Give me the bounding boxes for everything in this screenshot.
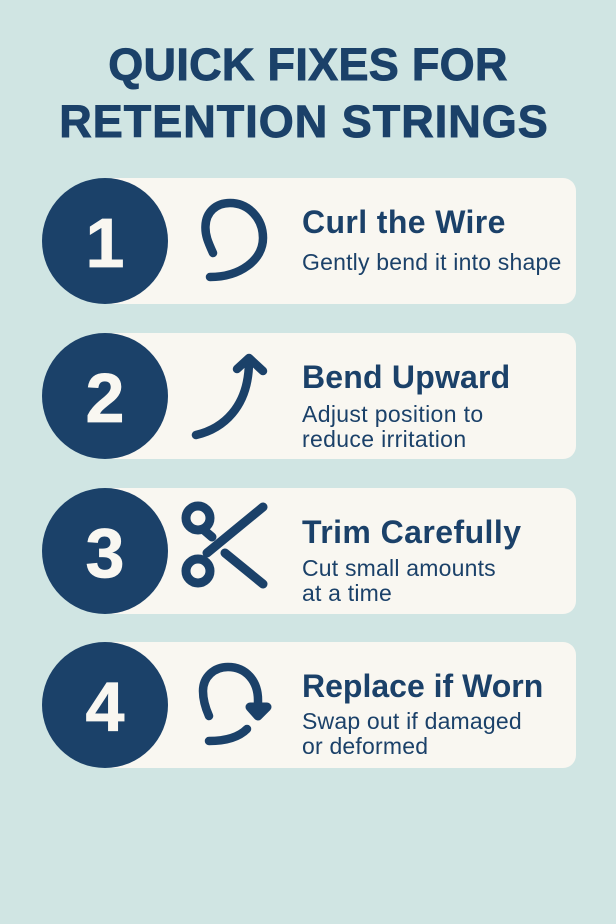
panel: step 3 <box>100 488 576 614</box>
text: step 4 <box>302 708 522 759</box>
number 4: 4 <box>86 668 124 746</box>
panel: step 2 <box>100 333 576 459</box>
text: step 3: Cut small amounts <box>302 555 496 581</box>
heading: step 3: Trim Carefully <box>302 514 521 550</box>
number 3 <box>42 488 168 614</box>
text: step 2 <box>302 401 483 452</box>
number 2 <box>42 333 168 459</box>
title: QUICK FIXES FOR <box>108 39 508 90</box>
icon: curl <box>205 203 263 277</box>
text: step 4: Swap out if damaged <box>302 708 522 734</box>
title: RETENTION STRINGS <box>59 96 549 147</box>
heading: step 1: Curl the Wire <box>302 204 506 240</box>
heading: step 2: Bend Upward <box>302 359 510 395</box>
icon: replace <box>203 667 267 741</box>
number 2: 2 <box>86 359 124 437</box>
text: step 3: at a time <box>302 580 392 606</box>
number 1 <box>42 178 168 304</box>
number 3: 3 <box>86 514 124 592</box>
panel: step 1 <box>100 178 576 304</box>
text: step 2: reduce irritation <box>302 426 466 452</box>
icon: arrow up <box>196 358 263 435</box>
panel: step 4 <box>100 642 576 768</box>
text: step 1: Gently bend it into shape <box>302 249 561 275</box>
number 1: 1 <box>86 204 124 282</box>
text: step 3 <box>302 555 496 606</box>
text: step 2: Adjust position to <box>302 401 483 427</box>
heading: step 4: Replace if Worn <box>302 668 543 704</box>
number 4 <box>42 642 168 768</box>
icon: scissors <box>186 506 263 584</box>
title <box>59 39 549 147</box>
text: step 4: or deformed <box>302 733 428 759</box>
